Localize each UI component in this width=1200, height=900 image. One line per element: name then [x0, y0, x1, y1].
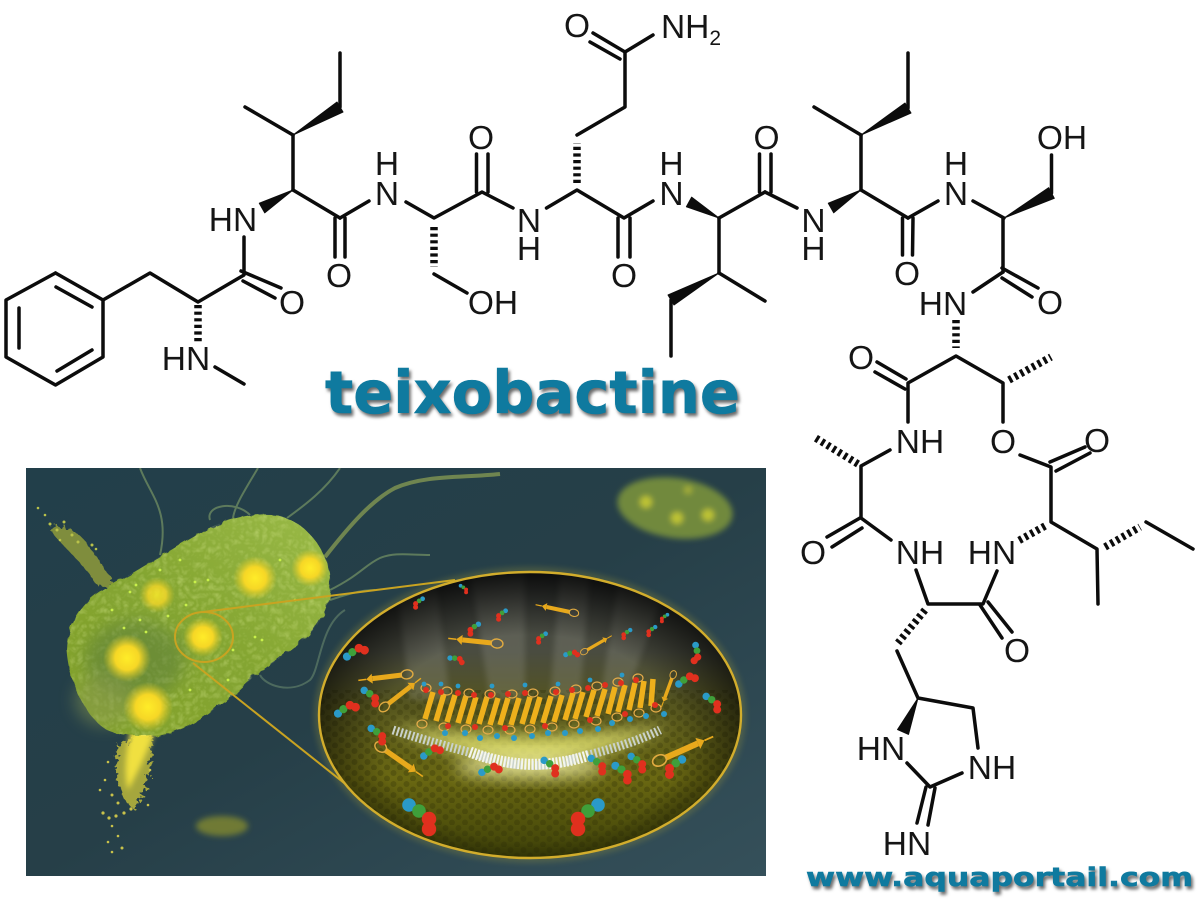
serine residue 1 bonds	[406, 154, 513, 293]
website: www.aquaportail.com: www.aquaportail.com	[806, 863, 1193, 893]
atom labels: O	[564, 8, 590, 45]
lysing stream top left	[37, 507, 112, 590]
atom labels: N	[659, 176, 684, 213]
atom labels: OH	[468, 285, 518, 322]
atom labels: HN	[209, 202, 257, 239]
atom labels: OH	[1037, 120, 1087, 157]
cell wall band	[393, 730, 660, 766]
peptide end rings of the row	[417, 674, 661, 734]
atom labels: NH	[896, 535, 944, 572]
glow under membrane	[390, 725, 670, 762]
isoleucine residue 3 bonds	[814, 53, 938, 255]
atom labels: O	[326, 258, 352, 295]
atom labels: H	[944, 146, 968, 183]
title: teixobactine: teixobactine	[325, 358, 740, 427]
atom labels: O	[848, 340, 874, 377]
glutamine residue bonds	[546, 33, 653, 257]
atom labels: O	[1084, 423, 1110, 460]
lipid II clusters	[402, 798, 436, 836]
atom labels	[162, 8, 1110, 863]
atom labels: NH	[661, 9, 709, 46]
bacterium body	[67, 514, 330, 736]
atom labels: N	[375, 176, 399, 213]
atom labels: HN	[162, 341, 210, 378]
atom labels: O	[468, 120, 494, 157]
atom labels: O	[894, 256, 920, 293]
zoom callout lines	[174, 579, 455, 784]
bright surface speckles	[111, 559, 296, 691]
atom labels: N	[944, 176, 968, 213]
hashed bond to N-methyl	[194, 305, 202, 342]
atom labels: 2	[709, 27, 721, 50]
atom labels: H	[659, 146, 684, 183]
atom labels: H	[801, 231, 826, 268]
free peptide arrows	[536, 603, 580, 617]
magnified lens	[314, 567, 746, 863]
light rays	[404, 586, 652, 702]
teixobactin beta-sheet row	[425, 679, 653, 725]
atom labels: O	[753, 120, 780, 157]
atom labels: N	[801, 203, 826, 240]
panel: bacterium illustration	[26, 468, 766, 876]
atom labels: O	[1004, 633, 1030, 670]
atom labels: HN	[919, 286, 967, 323]
atom labels: HN	[968, 535, 1016, 572]
atom labels: O	[1037, 285, 1063, 322]
isoleucine residue 2 bonds	[668, 154, 797, 356]
glutamine hashed bond	[573, 143, 581, 183]
depsipeptide ring bonds	[827, 356, 1193, 638]
atom labels: O	[800, 535, 826, 572]
atom labels: O	[279, 285, 305, 322]
hashed stereo bonds of the ring	[814, 320, 1140, 643]
panel background	[26, 468, 766, 876]
blurred small bacterium	[196, 816, 248, 836]
red, green and blue residues of the row	[423, 677, 658, 731]
phenyl ring	[6, 273, 103, 385]
flagella	[140, 468, 500, 688]
serine residue 2 bonds	[973, 155, 1054, 297]
glowing spots	[103, 634, 151, 682]
lysing stream bottom	[98, 734, 158, 854]
atom labels: H	[517, 231, 541, 268]
serine hashed bond	[430, 227, 438, 267]
atom labels: NH	[968, 750, 1016, 787]
atom labels: O	[990, 424, 1016, 461]
atom labels: H	[375, 146, 399, 183]
N-methyl phenylalanine residue bonds	[103, 237, 281, 384]
background bacterium	[614, 474, 736, 542]
isoleucine residue 1 bonds	[245, 53, 369, 257]
atom labels: HN	[857, 731, 905, 768]
atom labels: HN	[883, 826, 931, 863]
atom labels: NH	[896, 424, 944, 461]
atom labels: N	[517, 203, 541, 240]
enduracididine ring bonds	[897, 651, 978, 825]
atom labels: O	[611, 258, 637, 295]
